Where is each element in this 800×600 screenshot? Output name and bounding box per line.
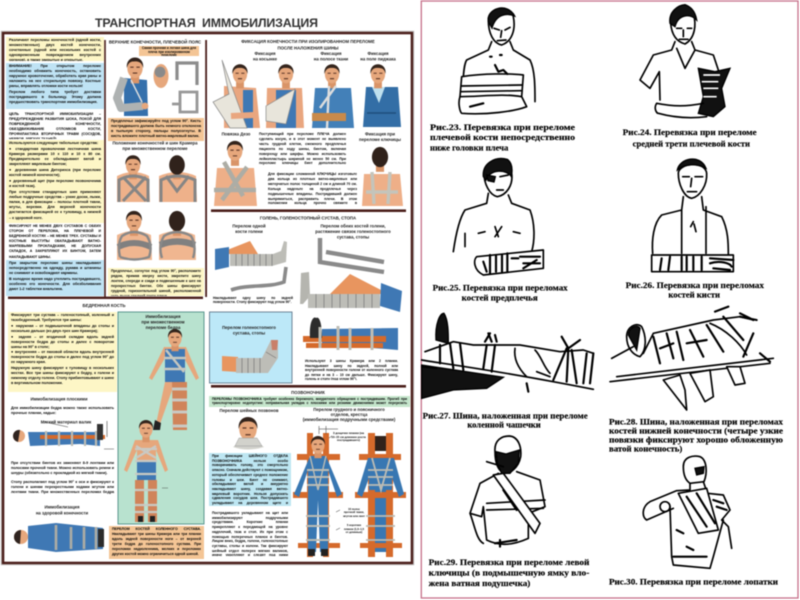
caption: figure 28 xyxy=(609,416,784,454)
heading: Kramer splints: при множественном переломе xyxy=(122,146,188,151)
text: flat boards dressing: При отсутствии бинтов их заменяют 8-9 лентами или полосами прочной ткани. Можно использовать ремни и шнуры (обязательно с прокладкой из мягкой ткани). xyxy=(11,461,114,475)
sublabels: spine fractures: отделов, крестца xyxy=(331,412,368,417)
callouts: spine dimensions xyxy=(319,426,340,530)
caption: figure 24: Рис.24. Перевязка при переломе xyxy=(623,127,757,137)
heading: femur: БЕДРЕННАЯ КОСТЬ xyxy=(82,303,126,308)
caption: figure 27 xyxy=(423,410,588,430)
text: femur overview: Наружную шину фиксируют к туловищу в нескольких местах. Все три шины фиксируют к бедру, к голени и нижнему отделу голени. Стопу прибинтовывают к шине в вертикальном положении. xyxy=(11,366,114,385)
sublabels: fixation types: Фиксация xyxy=(254,51,276,56)
text: means of immobilisation: ● деревянный щит (при переломе позвоночника и костей таза). xyxy=(9,179,101,188)
text: femur overview: Фиксируют три сустава – голеностопный, коленный и тазобедренный. Требуются три шины: xyxy=(11,313,114,322)
caption: figure 27: коленной чашечки xyxy=(467,420,541,430)
sublabels: fixation types: Фиксация xyxy=(320,51,342,56)
figure 30: shoulder blade bandage xyxy=(643,456,732,568)
figure: back chest splint xyxy=(159,211,196,260)
heading: isolated fracture: ПОСЛЕ НАЛОЖЕНИЯ ШИНЫ xyxy=(278,46,338,51)
figure 28: lower limb splint xyxy=(610,307,773,410)
text: warning on open fractures xyxy=(6,63,104,109)
panel: ankle fracture xyxy=(210,312,292,383)
sublabels: spine fractures xyxy=(220,407,396,422)
caption: figure 29: ключицы (в подмышечную ямку вло- xyxy=(429,568,590,578)
figure: kerchief sling xyxy=(266,64,304,128)
figure 23: shoulder fracture bandage xyxy=(459,8,535,114)
panel: ankle fracture: Перелом голеностопного xyxy=(222,325,276,330)
figure: Deso bandage xyxy=(214,141,257,206)
sublabels: fixation types: на полосе ткани xyxy=(314,56,349,62)
sublabels: fixation types: Фиксация xyxy=(367,51,389,56)
caption: figure 28: костей нижней конечности (четыре узкие xyxy=(609,425,783,435)
panel: multiple femur fractures: переломе бедра xyxy=(146,325,181,330)
heading: Kramer splints: Положение конечностей и шин Крамера xyxy=(112,140,198,146)
caption: figure 30: Рис.30. Перевязка при переломе лопатки xyxy=(609,576,778,586)
sublabels: lower leg fractures: сустава, стопы xyxy=(337,234,369,240)
sublabels: lower leg fractures xyxy=(232,224,391,240)
label: clavicle fixation xyxy=(359,132,401,142)
caption: figure 26: костей кисти xyxy=(668,289,720,299)
text: femur overview: ● наружная – от подмышечной впадины до стопы и несколько дальше (из двух-трех шин Крамера); xyxy=(11,324,114,333)
label: Deso bandage: Повязка Дезо xyxy=(222,132,251,136)
heading: healthy limb immobilisation: Иммобилизация xyxy=(45,504,80,510)
panel: multiple femur fractures: при множественном xyxy=(141,320,185,324)
caption: figure 23: ниже головки плеча xyxy=(430,142,509,152)
text: means of immobilisation: ● стандартная проволочная лестничная шина Крамера размерами 10 x 110 и 10 x 80 см. Предварительно ее обкладывают ватой и закрепляют марлевым бинтом; xyxy=(9,147,101,166)
text: board dimensions lower: 10 полос прочной ткани, жгутов или лент xyxy=(343,508,365,518)
figure: neck collar xyxy=(233,417,264,450)
figure 29: clavicle bandage xyxy=(470,436,545,547)
figure: kerchief open xyxy=(213,60,260,128)
text: means of immobilisation: ● деревянная шина Дитерихса (при переломе костей нижней конечности); xyxy=(9,168,101,177)
text: knee fracture: ПЕРЕЛОМ КОСТЕЙ КОЛЕННОГО СУСТАВА. Накладывают три шины Крамера или три планки вдоль задней поверхности ноги – от верхней трети бедра до голеностопного сустава. При переломах надколенника, мелких и переломах других костей можно ограничиться одной шиной. xyxy=(112,527,201,556)
caption: figure 23 xyxy=(430,122,575,152)
figure: man with arm splint xyxy=(117,58,148,116)
figure: bandaged shin xyxy=(215,241,287,270)
text: single shin splint note: Накладывают одну шину по задней поверхности. Стопу фиксируют под углом 90°. xyxy=(213,296,293,304)
figure 25: forearm bandage xyxy=(453,159,543,275)
caption: figure 25: костей предплечья xyxy=(462,293,538,303)
sublabels: lower leg fractures: Перелом одной xyxy=(232,224,266,228)
sublabels: fixation types: на поле пиджака xyxy=(360,56,396,62)
text: board dimensions lower xyxy=(342,507,366,534)
caption: figure 27: Рис.27. Шина, наложенная при переломе xyxy=(423,410,588,420)
caption: figure 29 xyxy=(429,557,590,588)
figure: spine back on boards xyxy=(355,433,406,557)
heading: healthy limb immobilisation xyxy=(36,504,89,516)
heading: shin and ankle: ГОЛЕНЬ, ГОЛЕНОСТОПНЫЙ СУСТАВ, СТОПА xyxy=(260,216,356,220)
caption: figure 23: плечевой кости непосредственно xyxy=(430,132,575,142)
figure: jacket fold fixation xyxy=(363,64,401,127)
icon: hand and wire splints xyxy=(154,63,197,112)
text: means of immobilisation xyxy=(6,140,104,223)
panel: multiple femur fractures: Иммобилизация xyxy=(146,314,181,319)
figure: lying patient tied to healthy leg xyxy=(14,523,104,552)
sublabels: spine fractures: Перелом шейных позвонов xyxy=(220,408,279,413)
sublabels: fixation types xyxy=(253,51,396,62)
figure: bandaged leg with splint xyxy=(300,272,402,312)
label: soft spacer: Мягкий материал валик xyxy=(41,420,92,424)
figure: front X splint xyxy=(117,155,150,202)
text: closed fractures and cold: В холодное время надо утеплить пострадавшего, особенно его конечности. Для обезболивания дают 1-2 таблетки анальгина. xyxy=(9,277,101,291)
panel: ankle fracture: сустава, стопы xyxy=(233,330,265,336)
text: femur overview: ● задняя – от ягодичной складки вдоль задней поверхности бедра до стопы и далее с поворотом шины на 90° в стопе; xyxy=(11,335,114,349)
column dividers xyxy=(8,40,406,388)
caption: figure 29: жена ватная подушечка) xyxy=(429,578,531,588)
figure 26: hand bandage xyxy=(652,159,733,272)
caption: figure 25: Рис.25. Перевязка при переломах xyxy=(433,283,568,293)
caption: figure 24 xyxy=(623,127,757,149)
text: means of immobilisation: При отсутствии стандартных шин применяют любые подручные средства – узкие доски, лыжи, палки, а для фиксации – полосы плотной ткани, жгуты, веревки. Для верхней конечности достигается фиксацией ее к туловищу, а нижней – к здоровой ноге. xyxy=(9,190,101,220)
heading: Kramer splints xyxy=(112,140,198,151)
heading: isolated fracture: ФИКСАЦИЯ КОНЕЧНОСТИ ПРИ ИЗОЛИРОВАННОМ ПЕРЕЛОМЕ xyxy=(241,39,375,44)
photo panel border xyxy=(421,1,798,598)
sublabels: lower leg fractures: растяжение связок голеностопного xyxy=(315,229,391,234)
text: warning on open fractures: Перелом любого типа требует доставки пострадавшего в больницу. Этому должна предшествовать транспортная иммобилизация. xyxy=(9,90,101,104)
panel: multiple femur fractures xyxy=(118,312,204,524)
text: forearm position: Предплечье зафиксируйте под углом 90°. Кисть пострадавшего должна быть немного отклонена в тыльную сторону, пальцы полусогнуты. В кисть вложите плотный ватно-марлевый валик. xyxy=(111,119,201,138)
figure: front chest splint xyxy=(117,211,152,260)
sublabels: spine fractures: Перелом грудного и поясничного xyxy=(313,407,385,412)
heading: flat board immobilisation: Иммобилизация плоскими xyxy=(31,396,88,402)
heading: isolated fracture xyxy=(241,39,375,51)
figure: femur splint single leg xyxy=(149,329,199,430)
sublabels: fixation types: на косынке xyxy=(253,56,278,62)
caption: figure 25 xyxy=(433,283,568,303)
text: board dimensions lower: 5 коротких планок (1,0–1,5 от длинных) xyxy=(344,524,364,534)
text: closed fractures and cold xyxy=(6,260,104,296)
label: clavicle fixation: Фиксация при xyxy=(365,132,395,136)
figure: improvised leg splint xyxy=(303,318,398,350)
poster frame xyxy=(1,31,414,565)
sublabels: spine fractures: (иммобилизация подручными средствами) xyxy=(303,417,396,422)
caption: figure 26 xyxy=(626,280,765,299)
heading: healthy limb immobilisation: на здоровой конечности xyxy=(36,510,89,516)
caption: figure 24: средней трети плечевой кости xyxy=(633,139,750,149)
sublabels: lower leg fractures: кости голени xyxy=(235,229,263,234)
figure: single Kramer splint xyxy=(231,267,286,290)
figure 27: kneecap splint xyxy=(422,313,593,398)
figure: femur splint both legs xyxy=(124,420,168,522)
caption: figure 28: Рис.28. Шина, наложенная при переломах xyxy=(609,416,784,426)
heading: upper limbs: ВЕРХНИЕ КОНЕЧНОСТИ, ПЛЕЧЕВОЙ ПОЯС xyxy=(109,40,201,44)
text: means of immobilisation: Используются следующие табельные средства: xyxy=(9,141,98,145)
label: clavicle fixation: переломе ключицы xyxy=(359,137,401,142)
figure: lying patient with boards xyxy=(13,421,114,449)
caption: figure 29: Рис.29. Перевязка при переломе левой xyxy=(429,557,589,567)
text: flat boards intro: Для иммобилизации бедра можно также использовать прочные планки, надые: xyxy=(11,406,114,415)
figure 24: mid humerus bandage xyxy=(640,5,730,118)
figure: cloth strip fixation xyxy=(312,64,354,128)
caption: figure 23: Рис.23. Перевязка при переломе xyxy=(430,122,575,132)
text: closed fractures and cold: При закрытом переломе шины накладывают непосредственно на одежду, рукава и штанины не снимают и освобождают карманы. xyxy=(9,261,101,275)
text: warning on open fractures: ВНИМАНИЕ! При открытом переломе необходимо обнажить конечность, остановить наружное кровотечение, обработать края раны и наложить на нее стерильную повязку. Костные раны, вправлять отломки кости нельзя! xyxy=(9,64,101,88)
caption: figure 26: Рис.26. Перевязка при переломах xyxy=(626,280,765,290)
text: fixation rules: ФИКСИРУЮТ НЕ МЕНЕЕ ДВУХ СУСТАВОВ С ОБЕИХ СТОРОН ОТ ПЕРЕЛОМА, НА ПЛЕЧЕВОЙ И БЕДРЕННОЙ КОСТЯХ – НЕ МЕНЕЕ ТРЕХ. СУСТАВЫ И КОСТНЫЕ ВЫСТУПЫ ОБКЛАДЫВАЮТ ВАТНО-МАРЛЕВЫМИ ПРОКЛАДКАМИ, НЕ ДОПУСКАЯ СКЛАДОК, А ЗАКРЕПЛЯЮТ ИХ БИНТОМ, ЗАТЕМ НАКЛАДЫВАЮТ ШИНЫ. xyxy=(9,224,101,259)
text: femur overview xyxy=(8,312,117,392)
caption: figure 28: ватой конечность) xyxy=(609,444,682,454)
heading: spine: ПОЗВОНОЧНИК xyxy=(291,390,325,395)
figure: clavicle back xyxy=(362,147,403,206)
figure: back X splint xyxy=(159,155,197,202)
caption: figure 28: повязки фиксируют хорошо обложенную xyxy=(609,435,784,445)
sublabels: lower leg fractures: Перелом обеих костей голени, xyxy=(320,224,386,228)
text: femur overview: ● внутренняя – от паховой области вдоль внутренней поверхности бедра до стопы и далее под углом 90° до ее наружного края. xyxy=(11,350,114,364)
figure: long Kramer splints xyxy=(320,238,384,272)
poster title: ТРАНСПОРТНАЯ ИММОБИЛИЗАЦИЯ xyxy=(95,16,318,30)
figure: spine front on boards xyxy=(293,433,343,557)
